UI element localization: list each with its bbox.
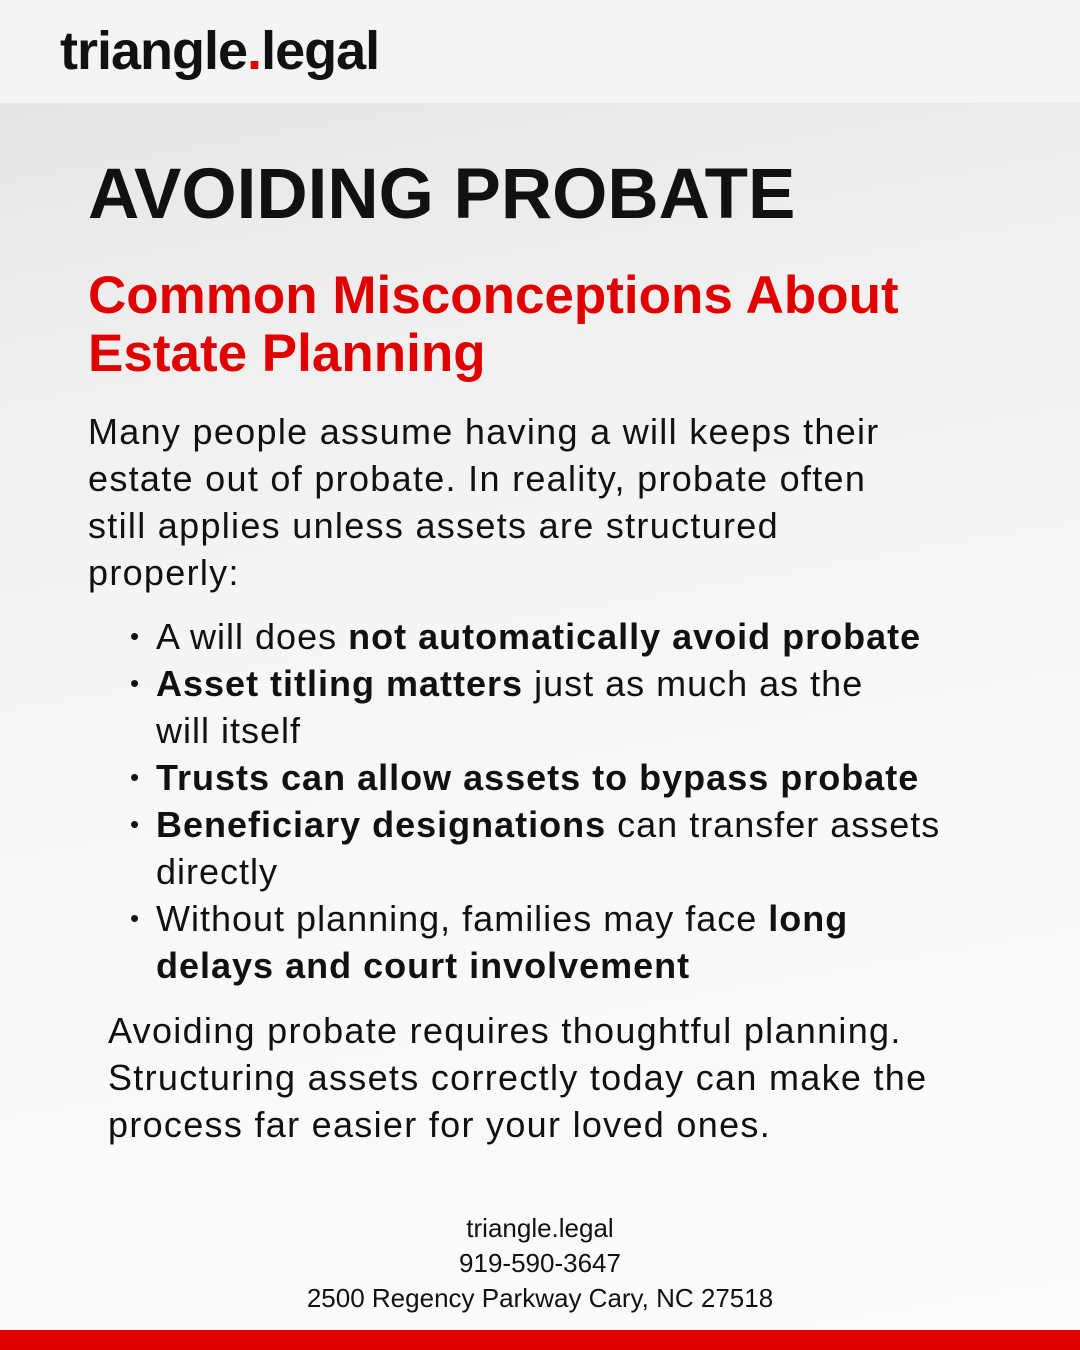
logo: triangle.legal xyxy=(60,21,379,81)
bullet list: Trusts can allow assets to bypass probate xyxy=(156,757,919,798)
footer contact: 919-590-3647 xyxy=(459,1248,621,1278)
subtitle: Estate Planning xyxy=(88,324,486,383)
intro paragraph: estate out of probate. In reality, probate often xyxy=(88,458,866,499)
closing paragraph: Avoiding probate requires thoughtful planning. xyxy=(108,1010,902,1051)
intro paragraph xyxy=(88,411,880,593)
footer contact xyxy=(307,1213,773,1313)
subtitle xyxy=(88,266,899,383)
closing paragraph: process far easier for your loved ones. xyxy=(108,1104,771,1145)
bullet list xyxy=(131,616,940,986)
intro paragraph: Many people assume having a will keeps their xyxy=(88,411,880,452)
bullet list: Without planning, families may face long xyxy=(156,898,848,939)
footer contact: 2500 Regency Parkway Cary, NC 27518 xyxy=(307,1283,773,1313)
footer contact: triangle.legal xyxy=(466,1213,614,1243)
bullet list: delays and court involvement xyxy=(156,945,690,986)
title: AVOIDING PROBATE xyxy=(88,155,795,234)
bullet list: directly xyxy=(156,851,278,892)
bullet list: Beneficiary designations can transfer assets xyxy=(156,804,940,845)
closing paragraph xyxy=(108,1010,927,1145)
bottom red bar xyxy=(0,1330,1080,1350)
intro paragraph: properly: xyxy=(88,552,240,593)
bullet list: Asset titling matters just as much as the xyxy=(156,663,863,704)
bullet list: A will does not automatically avoid probate xyxy=(156,616,921,657)
closing paragraph: Structuring assets correctly today can make the xyxy=(108,1057,927,1098)
bullet list: will itself xyxy=(156,710,301,751)
subtitle: Common Misconceptions About xyxy=(88,266,899,325)
intro paragraph: still applies unless assets are structured xyxy=(88,505,779,546)
